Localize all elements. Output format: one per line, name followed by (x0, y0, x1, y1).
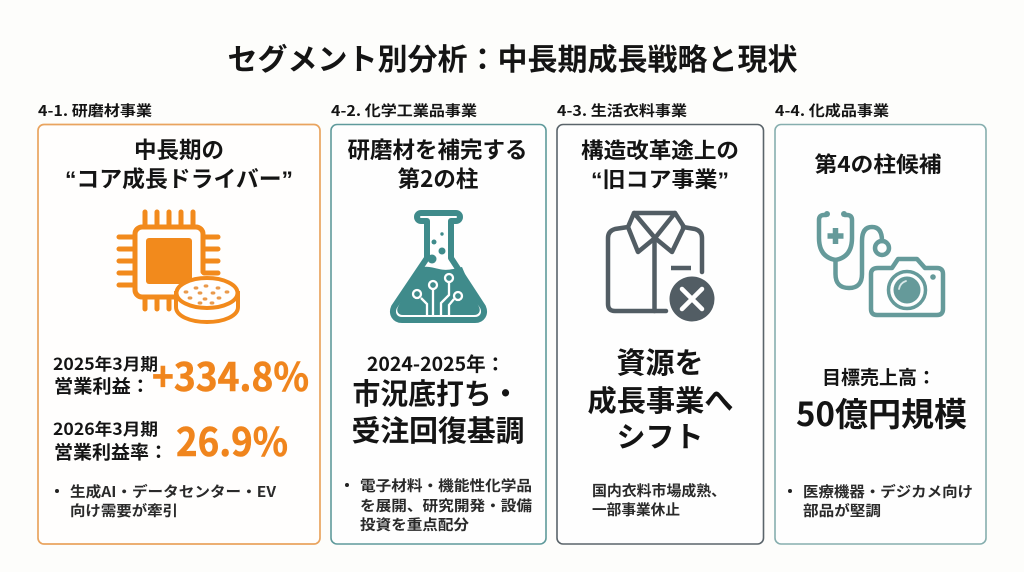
panel border 4-1 (38, 124, 320, 544)
heading 4-2: 研磨材を補完する (348, 133, 528, 165)
heading 4-1: 中長期の (134, 133, 224, 165)
bullet 4-4: 医療機器・デジカメ向け (803, 481, 973, 502)
panel: 4-1 abrasives (38, 100, 320, 544)
heading 4-3: “旧コア事業 ” (591, 163, 729, 194)
icon: chip and abrasive disk (119, 212, 238, 322)
metric: operating profit (53, 347, 309, 403)
status text 4-2: 2024-2025年： (367, 348, 505, 377)
section label 4-1: 4-1. 研磨材事業 (38, 100, 153, 121)
bullet 4-2: 投資を重点配分 (360, 514, 470, 535)
heading 4-2: 第2の柱 (398, 162, 478, 194)
panel: 4-4 chemical products (775, 100, 986, 544)
bullet 4-4: 部品が堅調 (803, 500, 881, 521)
note 4-3 (592, 480, 726, 520)
section label 4-3: 4-3. 生活衣料事業 (557, 100, 688, 121)
heading 4-4: 第4の柱候補 (814, 148, 942, 179)
section label 4-4: 4-4. 化成品事業 (775, 100, 890, 121)
status text 4-2 (352, 348, 524, 450)
panel: 4-2 chemicals (331, 100, 546, 544)
bullet 4-2 (345, 475, 533, 535)
status text 4-3: シフト (616, 414, 704, 456)
heading 4-1 (65, 133, 293, 194)
metric: operating margin (53, 412, 288, 468)
heading 4-2 (348, 133, 528, 194)
metric: operating profit: +334.8% (152, 347, 309, 403)
status text 4-2: 市況底打ち・ (352, 371, 520, 413)
note 4-3: 国内衣料市場成熟、 (592, 480, 726, 501)
panel border 4-4 (775, 124, 986, 544)
status text 4-3: 資源を (616, 340, 704, 382)
metric: operating margin: 2026年3月期 (53, 416, 158, 440)
bullet 4-2: を展開、研究開発・設備 (360, 495, 533, 516)
target text 4-4 (796, 363, 967, 436)
icon: shirt with cross (608, 213, 715, 322)
icon: stethoscope and camera (819, 211, 943, 315)
panel: 4-3 apparel (557, 100, 764, 544)
status text 4-2: 受注回復基調 (352, 408, 524, 450)
metric: operating margin: 営業利益率： (54, 439, 168, 465)
title: セグメント別分析：中長期成長戦略と現状 (228, 35, 798, 79)
target text 4-4: 50億円規模 (796, 388, 967, 436)
bullet 4-4 (788, 481, 973, 521)
heading 4-3 (581, 134, 739, 194)
panel border 4-3 (557, 124, 764, 544)
metric: operating profit: 営業利益： (54, 373, 150, 399)
bullet 4-1: 生成AI・データセンター・EV (70, 481, 277, 502)
status text 4-3: 成長事業へ (588, 378, 734, 420)
heading 4-3: 構造改革途上の (581, 134, 739, 165)
metric: operating margin: 26.9% (176, 412, 288, 468)
target text 4-4: 目標売上高： (822, 363, 936, 390)
bullet 4-1: 向け需要が牽引 (70, 500, 178, 521)
section label 4-2: 4-2. 化学工業品事業 (331, 100, 478, 121)
icon: flask with circuit (393, 213, 484, 320)
panel border 4-2 (331, 124, 546, 544)
note 4-3: 一部事業休止 (592, 499, 680, 520)
bullet 4-2: 電子材料・機能性化学品 (360, 475, 532, 496)
metric: operating profit: 2025年3月期 (53, 351, 158, 375)
status text 4-3 (588, 340, 734, 456)
bullet 4-1 (55, 481, 277, 521)
heading 4-1: “コア成長ドライバー” (65, 162, 293, 194)
